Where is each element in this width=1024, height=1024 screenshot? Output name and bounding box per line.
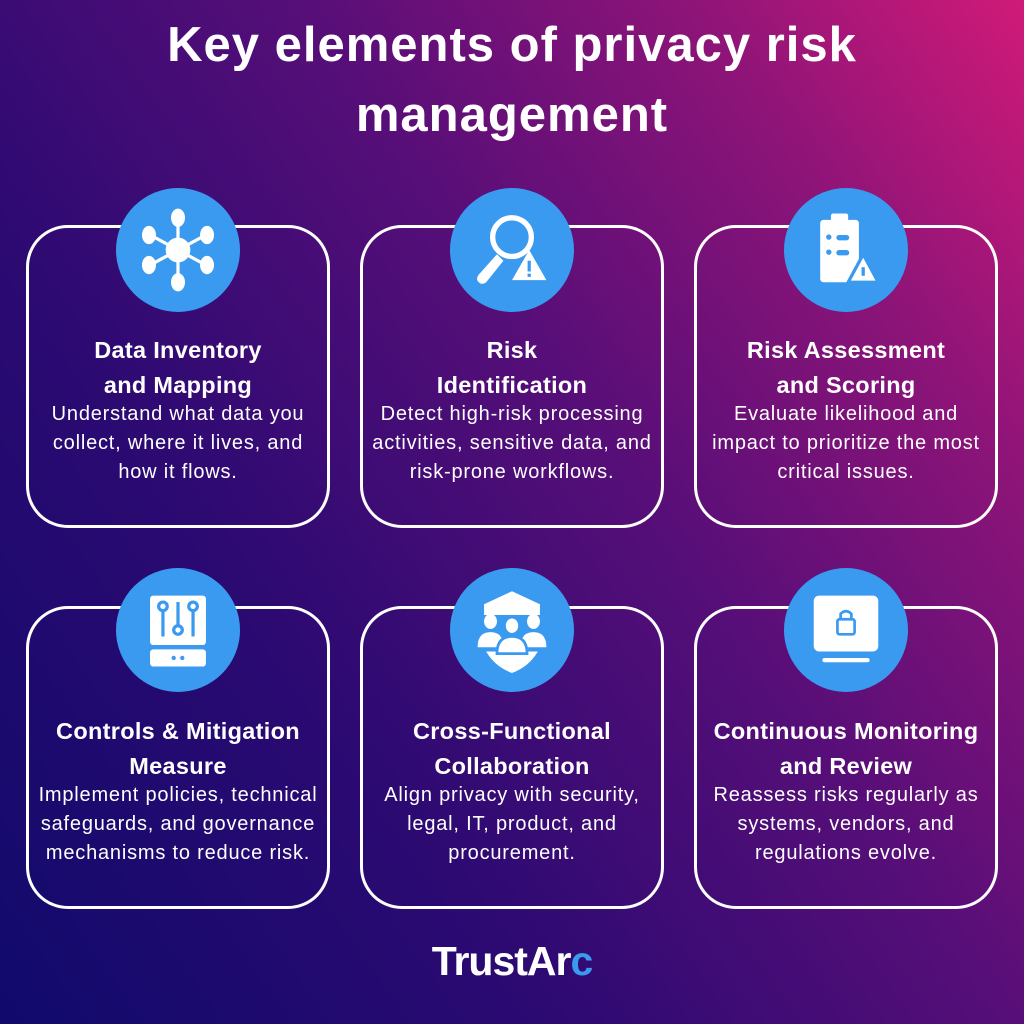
text: monitoring: Continuous Monitoring — [714, 718, 978, 744]
text: data inventory: how it flows. — [118, 461, 238, 483]
panel: risk identification — [360, 225, 664, 528]
icon: monitor lock — [784, 568, 908, 692]
text: controls: Controls & Mitigation — [56, 718, 300, 744]
panel: controls — [26, 606, 330, 909]
text: risk assessment: impact to prioritize the most — [712, 432, 980, 454]
panel: collaboration — [360, 606, 664, 909]
text: risk assessment: Evaluate likelihood and — [734, 403, 958, 425]
text: data inventory: Understand what data you — [52, 403, 304, 425]
text: collaboration: Cross-Functional — [413, 718, 611, 744]
text: data inventory: Data Inventory — [94, 337, 262, 363]
text: collaboration: procurement. — [448, 842, 576, 864]
text: monitoring: systems, vendors, and — [738, 813, 954, 835]
panel: risk assessment — [694, 225, 998, 528]
title — [167, 18, 857, 142]
text: collaboration — [384, 718, 640, 864]
text: collaboration: Collaboration — [434, 753, 590, 779]
text: data inventory: collect, where it lives, and — [53, 432, 303, 454]
text: risk assessment: and Scoring — [776, 372, 916, 398]
text: risk identification: activities, sensitive data, and — [372, 432, 652, 454]
text: monitoring: and Review — [780, 753, 912, 779]
text: risk assessment: critical issues. — [777, 461, 915, 483]
text: monitoring: Reassess risks regularly as — [713, 784, 978, 806]
text: risk identification: risk-prone workflows. — [410, 461, 614, 483]
icon: control panel — [116, 568, 240, 692]
text: risk assessment — [712, 337, 980, 483]
text: data inventory: and Mapping — [104, 372, 252, 398]
title: Key elements of privacy risk — [167, 18, 857, 72]
text: collaboration: Align privacy with security, — [384, 784, 640, 806]
text: risk identification: Risk — [487, 337, 537, 363]
text: monitoring: regulations evolve. — [755, 842, 937, 864]
icon: magnifier warning — [450, 188, 574, 312]
text: collaboration: legal, IT, product, and — [407, 813, 617, 835]
text: data inventory — [52, 337, 304, 483]
icon: network — [116, 188, 240, 312]
icon: clipboard warning — [784, 188, 908, 312]
text: controls: Measure — [129, 753, 227, 779]
text: risk assessment: Risk Assessment — [747, 337, 945, 363]
text: risk identification — [372, 337, 652, 483]
text: controls — [39, 718, 317, 864]
title: management — [356, 88, 668, 142]
panel: monitoring — [694, 606, 998, 909]
icon: team shield — [450, 568, 574, 692]
text: controls: safeguards, and governance — [41, 813, 315, 835]
text: controls: mechanisms to reduce risk. — [46, 842, 310, 864]
panel: data inventory — [26, 225, 330, 528]
text: controls: Implement policies, technical — [39, 784, 317, 806]
text: monitoring — [713, 718, 978, 864]
logo: TrustArc — [432, 938, 592, 984]
text: risk identification: Identification — [437, 372, 587, 398]
text: risk identification: Detect high-risk processing — [381, 403, 643, 425]
